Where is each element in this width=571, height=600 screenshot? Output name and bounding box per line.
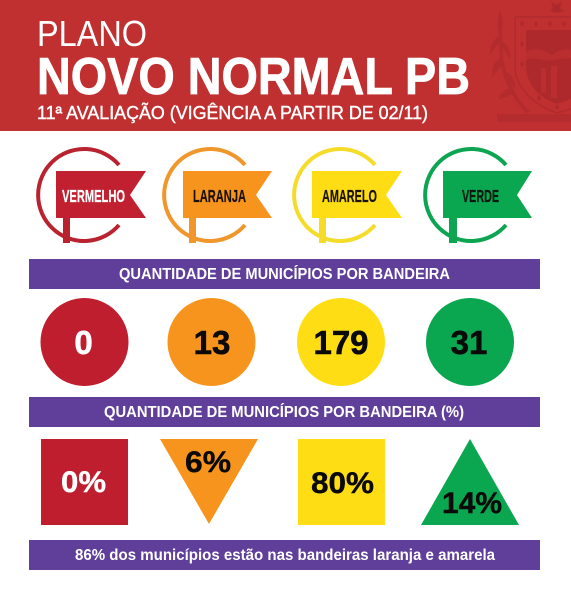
section bar: percentage by flag: QUANTIDADE DE MUNICÍPIOS POR BANDEIRA (%) bbox=[104, 402, 464, 421]
icon: coat of arms watermark bbox=[490, 1, 571, 122]
flag: vermelho bbox=[38, 149, 146, 243]
section bar: percentage by flag bbox=[29, 397, 540, 427]
flag: verde: VERDE bbox=[462, 186, 499, 206]
percent shape: yellow square: 80% bbox=[311, 467, 374, 500]
percent shape: orange triangle: 6% bbox=[185, 446, 231, 479]
percent shape: yellow square bbox=[298, 439, 385, 525]
percent shape: orange triangle bbox=[160, 439, 258, 524]
flag: amarelo: AMARELO bbox=[322, 186, 377, 206]
count circle: orange bbox=[168, 298, 256, 386]
count circle: yellow bbox=[297, 298, 385, 386]
count circle: red bbox=[40, 298, 128, 386]
count circle: green bbox=[426, 298, 514, 386]
flag: amarelo bbox=[294, 149, 402, 243]
summary bar: 86% dos municípios estão nas bandeiras laranja e amarela bbox=[75, 547, 495, 564]
subtitle: 11ª AVALIAÇÃO (VIGÊNCIA A PARTIR DE 02/11) bbox=[37, 102, 428, 123]
section bar: count by flag: QUANTIDADE DE MUNICÍPIOS POR BANDEIRA bbox=[119, 264, 450, 283]
flag: laranja: LARANJA bbox=[193, 186, 246, 206]
section bar: count by flag bbox=[29, 259, 540, 289]
header band bbox=[0, 0, 571, 131]
count circle: yellow: 179 bbox=[313, 324, 369, 361]
percent shape: green triangle bbox=[421, 439, 519, 525]
percent shape: red square: 0% bbox=[61, 466, 106, 499]
count circle: orange: 13 bbox=[194, 324, 230, 361]
flag: verde bbox=[425, 149, 532, 243]
title: NOVO NORMAL PB: NOVO NORMAL PB bbox=[37, 48, 470, 106]
title: PLANO: PLANO bbox=[37, 13, 147, 54]
count circle: red: 0 bbox=[74, 324, 93, 361]
flag: vermelho: VERMELHO bbox=[62, 186, 125, 206]
percent shape: red square bbox=[41, 439, 128, 525]
flag: laranja bbox=[164, 149, 272, 243]
count circle: green: 31 bbox=[451, 324, 487, 361]
summary bar bbox=[29, 540, 540, 570]
percent shape: green triangle: 14% bbox=[442, 487, 502, 520]
